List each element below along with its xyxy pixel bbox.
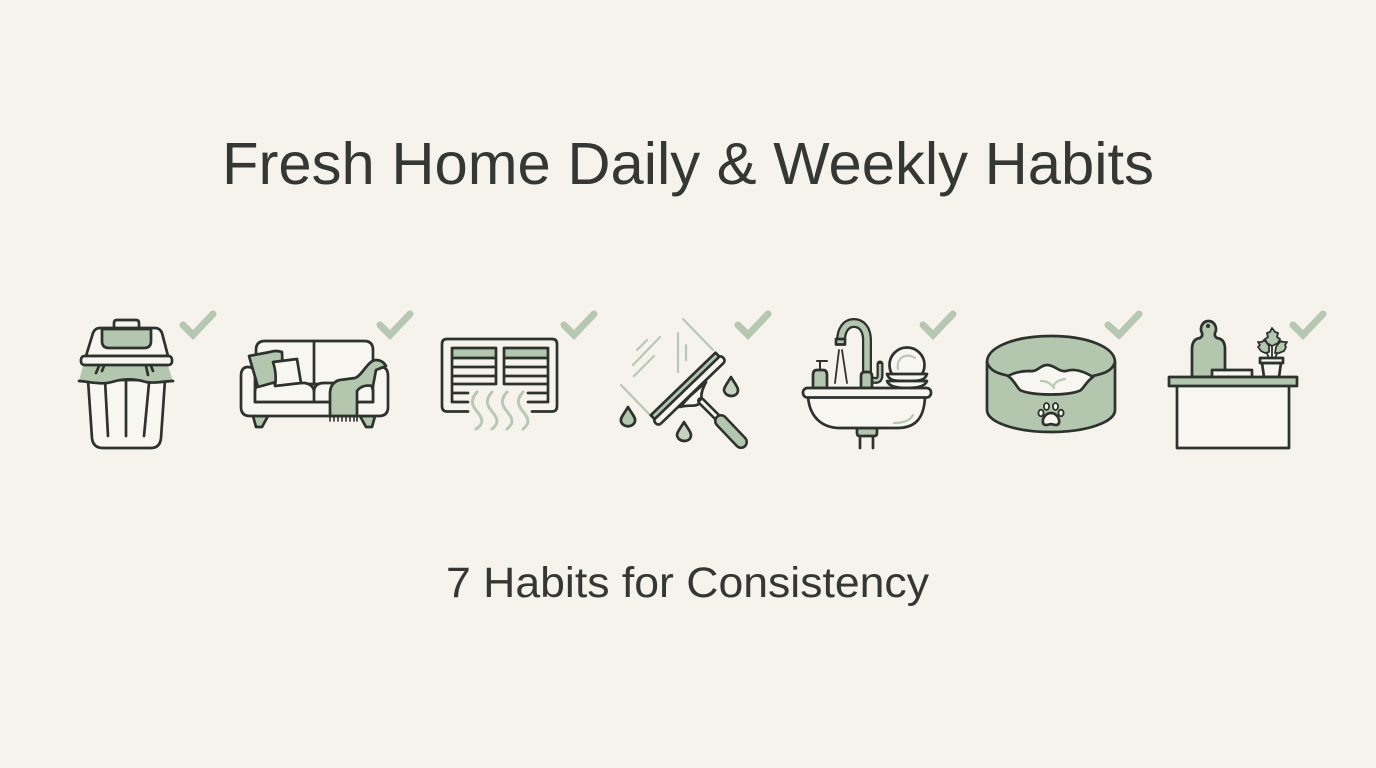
check mark 7: [1293, 314, 1323, 335]
icon: pet bed with paw: [987, 336, 1115, 432]
check mark 2: [380, 314, 410, 335]
icon: trash bin: [79, 320, 173, 448]
icon: kitchen counter with cutting board and plant: [1169, 321, 1297, 448]
icon: sofa with pillows and throw: [241, 341, 388, 427]
icon: air vent with airflow: [442, 339, 557, 429]
check mark 1: [183, 314, 213, 335]
airflow waves: [472, 392, 528, 429]
check mark 3: [564, 314, 594, 335]
paw print: [1038, 403, 1064, 425]
check mark 6: [1108, 314, 1139, 335]
check mark 5: [923, 314, 953, 335]
icon: sink with faucet and dishes: [803, 323, 931, 448]
title: Fresh Home Daily & Weekly Habits: [222, 131, 1154, 197]
icon: squeegee on window: [621, 319, 741, 442]
subtitle: 7 Habits for Consistency: [446, 559, 930, 607]
check mark 4: [738, 314, 768, 335]
